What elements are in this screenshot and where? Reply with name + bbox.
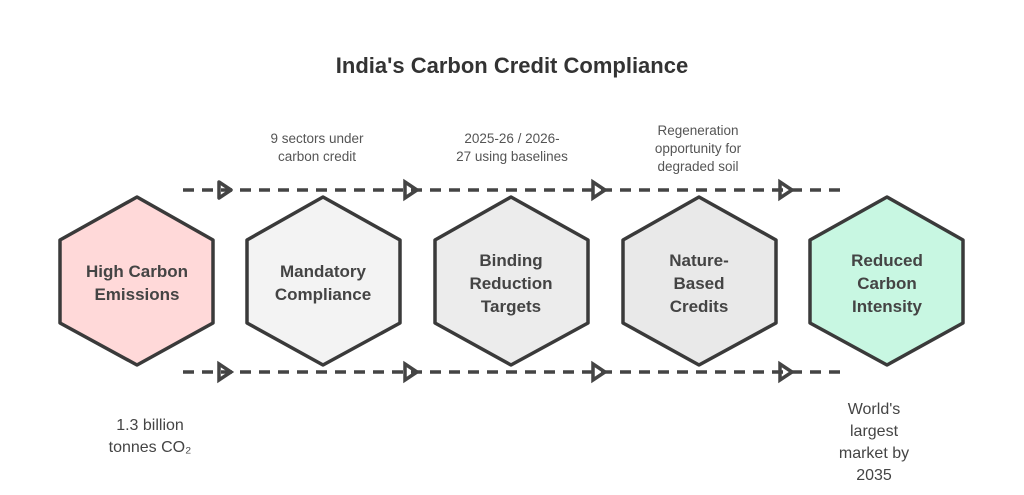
bottom note: 1.3 billion tonnes: tonnes CO₂ xyxy=(109,439,191,456)
bottom note: 1.3 billion tonnes: 1.3 billion xyxy=(116,417,184,434)
note: baselines: 2025-26 / 2026- xyxy=(464,131,560,146)
bottom dashed arrow line xyxy=(183,364,843,380)
hexagon: High Carbon Emissions: High Carbon xyxy=(86,262,188,281)
hexagon: Mandatory Compliance xyxy=(247,197,400,365)
hexagon: High Carbon Emissions xyxy=(60,197,213,365)
hexagon: High Carbon Emissions: Emissions xyxy=(94,285,180,304)
title: India's Carbon Credit Compliance xyxy=(336,53,688,78)
note: regeneration: degraded soil xyxy=(657,159,739,174)
bottom note: world's largest market: World's xyxy=(848,401,900,418)
note: regeneration: opportunity for xyxy=(655,141,742,156)
note: 9 sectors: carbon credit xyxy=(278,149,356,164)
bottom note: world's largest market: market by xyxy=(839,445,909,462)
hexagon: Reduced Carbon Intensity: Carbon xyxy=(857,274,917,293)
top annotations xyxy=(270,123,742,174)
hexagon: Nature-Based Credits: Based xyxy=(673,274,725,293)
hexagon: Binding Reduction Targets: Reduction xyxy=(469,274,553,293)
hexagon: Nature-Based Credits: Nature- xyxy=(669,251,729,270)
note: baselines: 27 using baselines xyxy=(456,149,568,164)
hexagon: Binding Reduction Targets xyxy=(435,197,588,365)
bottom note: world's largest market: 2035 xyxy=(856,467,892,484)
hexagon: Nature-Based Credits: Credits xyxy=(670,297,728,316)
hexagon: Mandatory Compliance: Mandatory xyxy=(280,262,367,281)
hexagon: Mandatory Compliance: Compliance xyxy=(275,285,371,304)
hexagon: Nature-Based Credits xyxy=(623,197,776,365)
hexagon: Binding Reduction Targets: Targets xyxy=(481,297,541,316)
top dashed arrow line xyxy=(183,182,843,198)
hexagon: Reduced Carbon Intensity: Reduced xyxy=(851,251,923,270)
hexagon: Reduced Carbon Intensity xyxy=(810,197,963,365)
note: regeneration: Regeneration xyxy=(657,123,739,138)
hexagon: Reduced Carbon Intensity: Intensity xyxy=(852,297,922,316)
hexagon: Binding Reduction Targets: Binding xyxy=(479,251,543,270)
note: 9 sectors: 9 sectors under xyxy=(270,131,364,146)
bottom note: world's largest market: largest xyxy=(850,423,899,440)
